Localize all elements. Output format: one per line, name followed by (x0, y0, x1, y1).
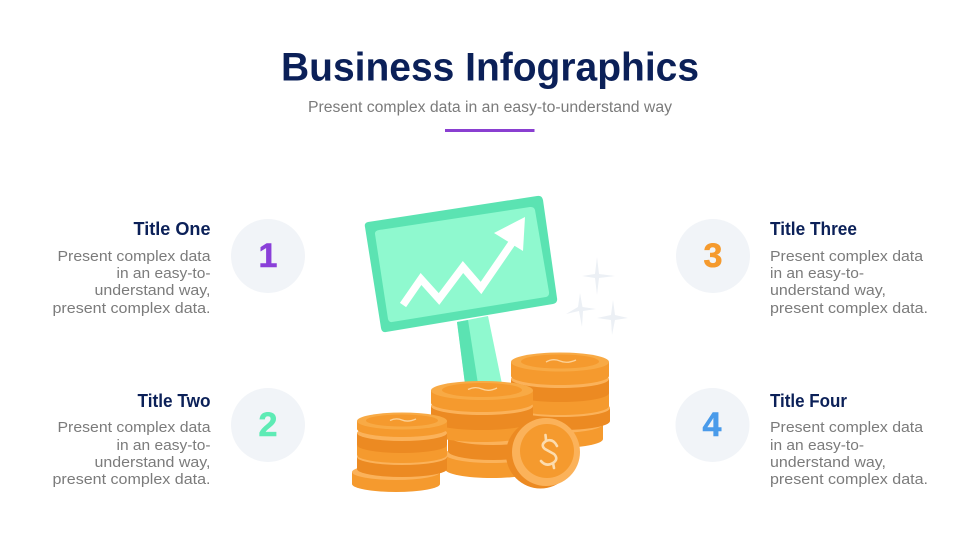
number badge 1: 1 (259, 237, 277, 275)
number badge 4 (676, 388, 750, 462)
sign post (457, 316, 502, 384)
text block: title four: Title Four (770, 391, 847, 411)
text block: title one: Title One (134, 219, 210, 239)
text block: title one (52, 219, 211, 317)
text block: title four (770, 391, 928, 488)
icon: sparkles (566, 257, 628, 335)
text block: title three (770, 219, 928, 317)
central illustration: sign and coins (352, 196, 628, 492)
text block: title three: in an easy-to- (770, 265, 864, 282)
text block: title four: Present complex data (770, 419, 924, 436)
text block: title three: understand way, (770, 282, 886, 299)
text block: title two (52, 391, 211, 488)
coin stack: left (352, 412, 447, 492)
number badge 3: 3 (704, 237, 722, 275)
text block: title two: present complex data. (52, 471, 210, 488)
text block: title one: present complex data. (52, 300, 210, 317)
text block: title two: in an easy-to- (116, 437, 210, 454)
number badge 4: 4 (703, 406, 722, 444)
sign board (365, 196, 557, 332)
text block: title one: understand way, (94, 282, 210, 299)
text block: title two: Title Two (138, 391, 210, 411)
text block: title three: present complex data. (770, 300, 928, 317)
text block: title four: present complex data. (770, 471, 928, 488)
text block: title one: Present complex data (58, 248, 211, 265)
title: Business Infographics (281, 46, 699, 90)
text block: title two: understand way, (94, 454, 210, 471)
icon: dollar sign (541, 435, 557, 468)
number badge 1 (231, 219, 305, 293)
text block: title four: in an easy-to- (770, 437, 864, 454)
text block: title three: Present complex data (770, 248, 924, 265)
subtitle: Present complex data in an easy-to-understand way (308, 99, 672, 116)
title accent underline (445, 129, 534, 132)
number badge 2: 2 (259, 406, 277, 444)
coin stack: right (507, 352, 610, 448)
text block: title one: in an easy-to- (116, 265, 210, 282)
text block: title two: Present complex data (58, 419, 211, 436)
coin stack: middle (431, 381, 539, 478)
number badge 2 (231, 388, 305, 462)
text block: title four: understand way, (770, 454, 886, 471)
number badge 3 (676, 219, 750, 293)
upright dollar coin (506, 418, 580, 488)
text block: title three: Title Three (770, 219, 857, 239)
icon: rising arrow on sign (403, 217, 525, 305)
